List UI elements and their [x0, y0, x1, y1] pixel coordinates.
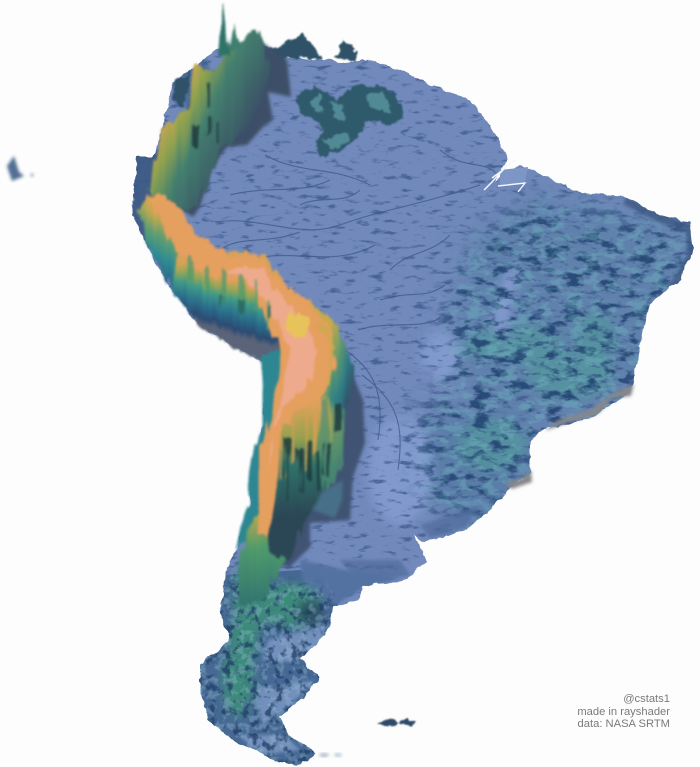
Amazon mouth channels — [484, 160, 528, 192]
coastal cast shadows — [505, 384, 634, 489]
Patagonia texture — [199, 569, 335, 766]
lower Andes curtain — [240, 515, 285, 605]
Andes crest pink core — [225, 268, 318, 470]
central shadow — [278, 320, 365, 567]
western coastal lowland blue — [132, 148, 159, 244]
credit: tool: made in rayshader — [577, 706, 670, 718]
dark Pampas flank — [300, 560, 400, 605]
small Tierra del Fuego islets — [319, 753, 342, 757]
crest eastern yellow rim — [318, 322, 334, 385]
northern coast peaks — [174, 34, 357, 108]
landmass with terrain — [132, 46, 694, 766]
teal foothill patch — [313, 480, 343, 518]
Andes crest orange body — [155, 197, 338, 540]
southern pampas dark patches — [342, 506, 477, 578]
eastern highland tone — [450, 195, 690, 430]
Patagonia base — [195, 570, 345, 767]
Galapagos islands — [7, 156, 33, 181]
teal highlands — [458, 312, 615, 471]
green curtain streaks on Peru slope — [190, 258, 268, 328]
western coast teal band — [237, 345, 285, 549]
pale plains — [368, 270, 520, 525]
northern Andes curtain — [147, 28, 270, 212]
credits: @cstats1 — [623, 693, 670, 705]
northern shadow — [175, 40, 291, 217]
lowland base colour — [132, 46, 694, 746]
tall northern spike — [218, 2, 231, 57]
Patagonia green ridge — [222, 558, 323, 716]
Marajo island — [500, 167, 528, 186]
southern Brazil tone — [426, 398, 536, 523]
northeast dark rim — [625, 200, 692, 290]
orange curtain streaks on southern slope — [283, 400, 330, 478]
southeast coast shadow — [545, 384, 634, 431]
Santa Catarina coast shadow — [505, 470, 532, 489]
Peru western curtain — [172, 250, 290, 362]
second northern spike — [229, 23, 240, 50]
highlands dark mass — [298, 85, 405, 158]
highlands teal facets — [312, 92, 392, 150]
eastern highland terrain texture — [398, 188, 693, 538]
central eastern flank — [290, 300, 355, 470]
southern green flank — [320, 395, 347, 492]
Peru north curtain — [138, 194, 210, 305]
Andes cast shadows — [175, 40, 365, 567]
Andes relief — [138, 2, 355, 605]
dark vertical streaks — [196, 85, 338, 500]
Falkland Islands — [378, 718, 417, 726]
credit: data source: data: NASA SRTM — [578, 718, 670, 730]
white channels — [484, 160, 525, 192]
Altiplano yellow patch — [285, 313, 311, 337]
southern eastern curtain — [262, 395, 345, 560]
Amazon basin terrain texture — [147, 50, 692, 604]
Patagonia lit slopes — [238, 625, 325, 755]
northern coastal blue — [172, 57, 211, 110]
Guiana highlands — [298, 85, 405, 158]
rivers — [215, 150, 495, 470]
